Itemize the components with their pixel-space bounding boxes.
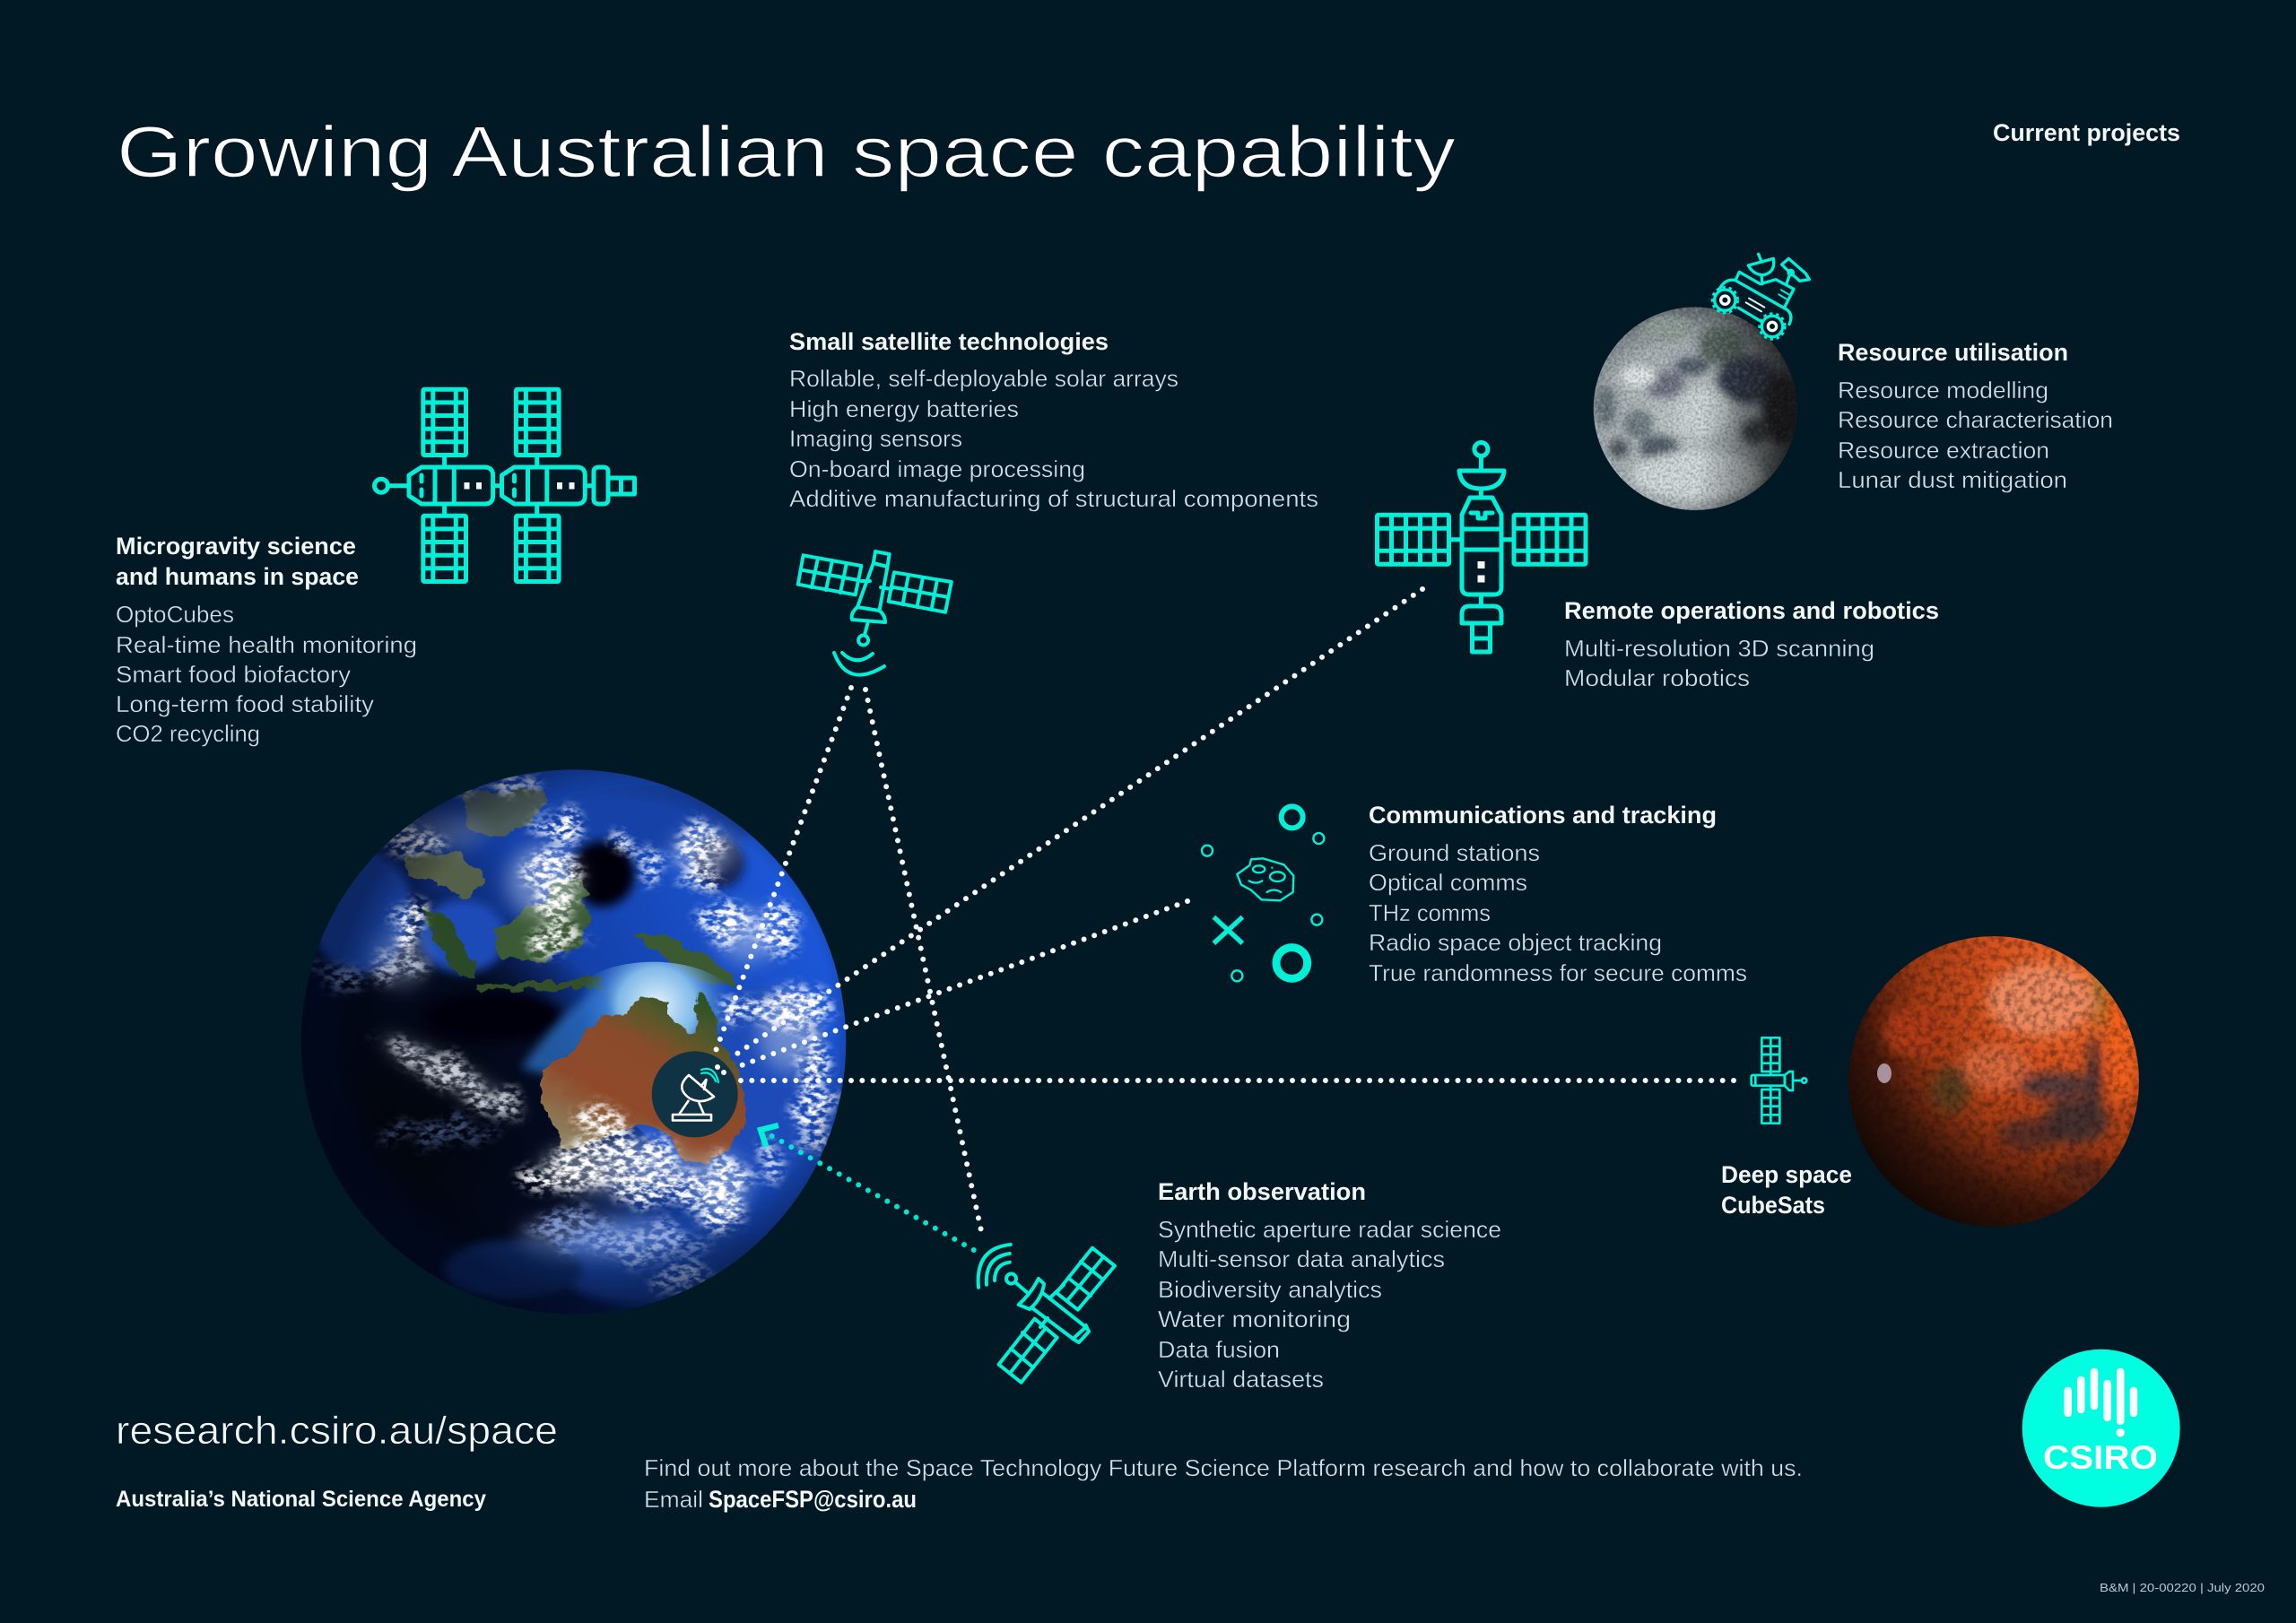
text: resource utilisation: Lunar dust mitigation (1838, 466, 2067, 493)
dotted link: small satellite to Earth observation satellite (865, 690, 983, 1239)
footer: contact text: SpaceFSP@csiro.au (709, 1486, 917, 1513)
text: communications and tracking (1369, 802, 1747, 986)
icon: lunar rover (1712, 254, 1809, 339)
rover wheels (1715, 290, 1735, 310)
text: small satellite technologies: Rollable, self-deployable solar arrays (789, 365, 1178, 392)
text: deep space CubeSats: CubeSats (1721, 1192, 1825, 1219)
icon: small satellite (798, 551, 952, 675)
text: microgravity science: CO2 recycling (116, 720, 260, 747)
limb shading (301, 769, 846, 1315)
text: small satellite technologies: On-board image processing (789, 456, 1085, 482)
text: resource utilisation: Resource utilisation (1838, 339, 2068, 366)
text: microgravity science: OptoCubes (116, 601, 234, 628)
icon: CubeSat (1752, 1037, 1806, 1124)
footer: website URL: research.csiro.au/space (116, 1409, 558, 1453)
text: microgravity science: Microgravity science (116, 533, 356, 560)
text: microgravity science: Long-term food stability (116, 690, 374, 717)
dotted link: ground station to communications (735, 901, 1187, 1068)
text: microgravity science: Real-time health monitoring (116, 631, 417, 658)
EO satellite body (1031, 1294, 1089, 1342)
small satellite panels (798, 555, 861, 595)
text: resource utilisation: Resource extraction (1838, 437, 2049, 464)
text: small satellite technologies: Additive manufacturing of structural components (789, 485, 1318, 512)
label: current projects: Current projects (1993, 119, 2180, 146)
planet: Earth (287, 753, 861, 1327)
icon: asteroid and orbit markers (1202, 806, 1324, 981)
rover camera mast (1782, 258, 1809, 281)
text: earth observation: Multi-sensor data analytics (1158, 1245, 1445, 1272)
footer: contact text: Email (644, 1486, 703, 1513)
footer: contact text (644, 1454, 1803, 1513)
logo: CSIRO (2022, 1350, 2180, 1507)
dark ocean patches (422, 838, 744, 1042)
remote satellite body (1462, 498, 1501, 595)
link dots near the antenna (715, 1064, 726, 1075)
land masses (404, 790, 741, 989)
text: communications and tracking: Ground stations (1369, 839, 1540, 866)
logo bars (2068, 1372, 2134, 1421)
footer: contact text: Find out more about the Space Technology Future Science Platform research and how to collaborate with us. (644, 1454, 1803, 1481)
logo wordmark: CSIRO (2043, 1439, 2158, 1476)
asteroid (1237, 858, 1293, 900)
EO satellite panels (1057, 1248, 1115, 1310)
dotted link: ground station to small satellite (712, 688, 851, 1062)
text: resource utilisation (1838, 339, 2113, 493)
icon: space station (microgravity) (375, 389, 635, 581)
planet: Moon (1594, 307, 1801, 510)
small satellite body (852, 551, 890, 622)
text: remote operations and robotics: Modular robotics (1564, 664, 1750, 691)
ocean base (373, 769, 847, 1315)
text: earth observation: Data fusion (1158, 1336, 1280, 1363)
title: Growing Australian space capability (117, 112, 1457, 193)
station module one (388, 457, 493, 514)
planet: Mars (1848, 936, 2140, 1227)
small satellite signal arcs (842, 653, 873, 660)
cross marker (1213, 917, 1242, 943)
text: earth observation: Virtual datasets (1158, 1366, 1324, 1393)
text: resource utilisation: Resource characterisation (1838, 406, 2113, 433)
blue ocean patches (309, 786, 829, 1306)
marker rings (1282, 806, 1303, 828)
text: earth observation: Biodiversity analytics (1158, 1276, 1382, 1303)
station lights (465, 482, 574, 490)
text: microgravity science: Smart food biofactory (116, 661, 351, 688)
station end module (585, 467, 635, 504)
text: communications and tracking: Communications and tracking (1369, 802, 1717, 829)
icon: signal arcs (701, 1069, 718, 1082)
text: microgravity science: and humans in space (116, 563, 359, 590)
text: communications and tracking: Radio space object tracking (1369, 929, 1662, 956)
icon: remote operations satellite (1378, 443, 1586, 652)
EO satellite dish (1019, 1279, 1044, 1309)
text: small satellite technologies: Imaging sensors (789, 425, 962, 452)
dotted link: ground station to deep space (726, 1078, 1734, 1083)
clouds (313, 771, 829, 1293)
dotted cyan link with arrowhead: Earth observation downlink (761, 1125, 974, 1250)
text: earth observation: Synthetic aperture radar science (1158, 1216, 1501, 1243)
footer: tagline: Australia’s National Science Agency (116, 1487, 486, 1512)
text: communications and tracking: True randomness for secure comms (1369, 959, 1747, 986)
rover hull (1719, 272, 1794, 325)
icon: Earth observation satellite (978, 1245, 1115, 1383)
remote satellite mast and dish (1474, 443, 1488, 456)
text: remote operations and robotics: Multi-resolution 3D scanning (1564, 635, 1874, 662)
text: deep space CubeSats (1721, 1161, 1852, 1219)
footer: production reference: B&M | 20-00220 | July 2020 (2100, 1581, 2265, 1594)
remote satellite panels (1378, 515, 1449, 564)
Australia (542, 993, 746, 1161)
dotted link: ground station to remote operations (735, 589, 1422, 1055)
text: small satellite technologies: Small satellite technologies (789, 328, 1109, 355)
ground station badge (652, 1051, 738, 1137)
icon: dish antenna (673, 1075, 714, 1121)
station solar panels (423, 389, 466, 456)
remote satellite lights (1478, 561, 1485, 583)
text: microgravity science (116, 533, 417, 747)
text: communications and tracking: THz comms (1369, 899, 1491, 926)
text: earth observation: Water monitoring (1158, 1306, 1351, 1332)
text: remote operations and robotics: Remote operations and robotics (1564, 597, 1939, 624)
text: resource utilisation: Resource modelling (1838, 377, 2048, 404)
soft cloud haze (371, 812, 818, 1258)
remote satellite base (1462, 606, 1501, 652)
text: small satellite technologies (789, 328, 1318, 512)
text: small satellite technologies: High energy batteries (789, 395, 1019, 422)
station module two (493, 457, 585, 514)
EO satellite signal arcs (995, 1263, 1010, 1280)
text: deep space CubeSats: Deep space (1721, 1161, 1852, 1188)
text: earth observation (1158, 1178, 1501, 1393)
text: earth observation: Earth observation (1158, 1178, 1366, 1205)
light halo north of Australia (585, 961, 726, 1035)
text: communications and tracking: Optical comms (1369, 869, 1527, 896)
rover dish (1748, 258, 1774, 275)
text: remote operations and robotics (1564, 597, 1939, 691)
